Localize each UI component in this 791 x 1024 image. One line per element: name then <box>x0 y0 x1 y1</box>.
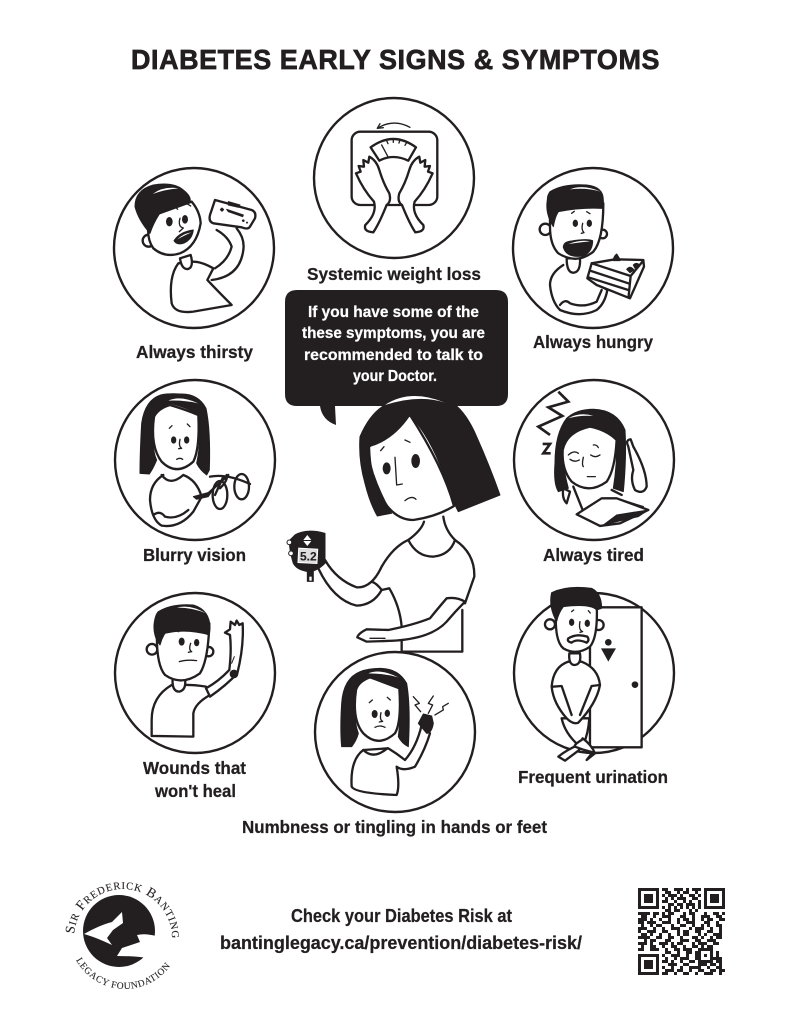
panel: wounds that won't heal <box>115 593 275 801</box>
icon: man eating cake <box>540 185 644 314</box>
icon: tired woman with book <box>538 392 648 526</box>
label: won't heal <box>154 781 236 801</box>
call to action: bantinglegacy.ca/prevention/diabetes-risk/ <box>220 933 582 953</box>
label: Always tired <box>543 545 644 565</box>
label: Blurry vision <box>143 545 246 565</box>
panel: always hungry <box>513 168 673 352</box>
logo: Sir Frederick Banting Legacy Foundation: LEGACY FOUNDATION <box>76 956 170 989</box>
call to action <box>220 906 582 953</box>
label: Systemic weight loss <box>307 264 481 284</box>
icon: woman holding glasses <box>140 394 250 526</box>
icon: woman with tingling hand <box>341 668 448 795</box>
panel: blurry vision <box>115 380 275 565</box>
bubble text: If you have some of the <box>308 304 479 321</box>
icon: man with wounded arm <box>147 605 243 737</box>
bubble text: these symptoms, you are <box>302 325 485 342</box>
bubble text: recommended to talk to <box>304 347 483 364</box>
logo: Sir Frederick Banting Legacy Foundation <box>66 882 179 989</box>
central figure: woman with glucose meter <box>287 396 500 652</box>
bubble text <box>302 304 485 385</box>
logo: Sir Frederick Banting Legacy Foundation: SIR FREDERICK BANTING <box>66 882 179 938</box>
speech bubble <box>285 290 508 425</box>
bubble text: your Doctor. <box>353 368 437 385</box>
label: Always thirsty <box>136 342 253 362</box>
icon: bathroom scale and feet <box>352 123 437 232</box>
call to action: Check your Diabetes Risk at <box>291 906 512 926</box>
icon: man drinking <box>135 184 255 312</box>
panel: always thirsty <box>114 168 274 362</box>
label: Always hungry <box>533 332 653 352</box>
icon: glucose meter <box>287 531 325 581</box>
label <box>143 758 246 801</box>
panel: systemic weight loss <box>307 98 481 284</box>
icon: man at restroom door <box>545 587 642 761</box>
panel: always tired <box>514 380 674 565</box>
panel: frequent urination <box>514 587 674 787</box>
title: DIABETES EARLY SIGNS & SYMPTOMS <box>131 44 660 75</box>
icon: glucose meter: 5.2 <box>300 550 317 564</box>
QR code <box>638 888 725 975</box>
label: Wounds that <box>143 758 246 778</box>
label: Numbness or tingling in hands or feet <box>242 817 547 837</box>
label: Frequent urination <box>518 767 668 787</box>
panel: numbness or tingling <box>242 652 547 837</box>
